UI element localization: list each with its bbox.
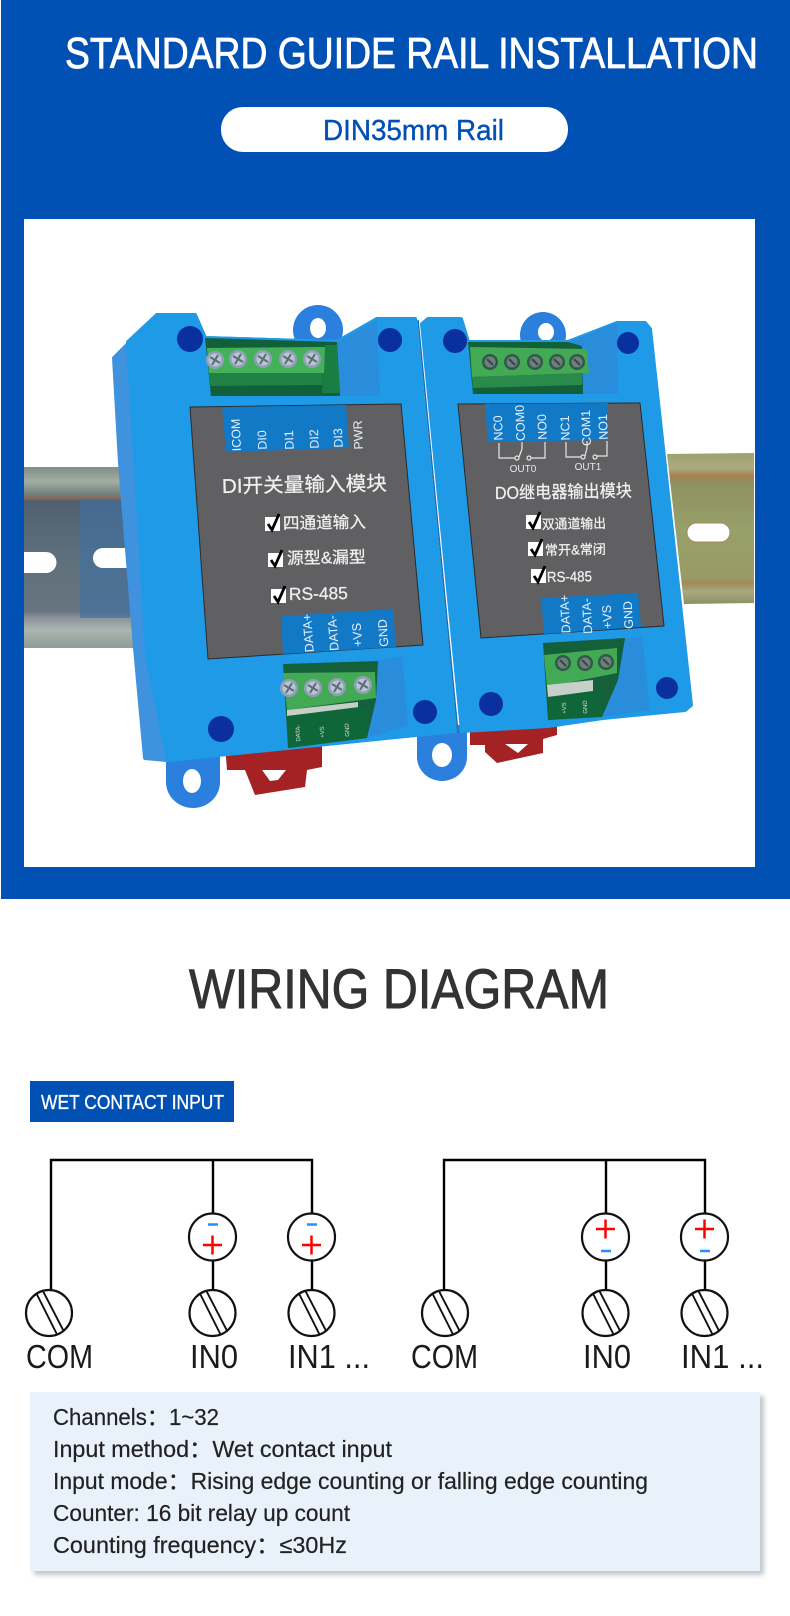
DO label panel: NO0 (535, 414, 550, 440)
DO bottom terminal block (543, 637, 650, 720)
DO label panel: 常开&常闭 (545, 542, 606, 558)
DI label panel: DATA- (325, 615, 342, 651)
DI bottom terminal block: GND (345, 723, 351, 737)
DIN rail right section (667, 453, 754, 604)
DO label panel: DO继电器输出模块 (495, 481, 632, 503)
DI label panel (190, 404, 423, 659)
DI label panel: DATA+ (300, 613, 317, 653)
DO label panel: DATA+ (557, 594, 573, 634)
DI label panel: GND (375, 619, 391, 647)
DI top terminal block (205, 320, 380, 396)
rail size pill (221, 107, 568, 152)
DO label panel: RS-485 (547, 569, 592, 586)
DO bottom terminal block: GND (583, 700, 589, 714)
DI bottom terminal block: +VS (320, 726, 326, 738)
wiring diagram: minus-top sources: COM (26, 1338, 93, 1375)
DI label panel: 四通道输入 (283, 513, 366, 533)
DI label panel: DI3 (331, 428, 346, 448)
DI label panel: 源型&漏型 (287, 548, 366, 568)
DI label panel: ICOM (229, 418, 244, 452)
wet contact input badge (30, 1081, 234, 1122)
DI label panel: DI2 (307, 429, 322, 449)
DO bottom terminal block: +VS (562, 702, 568, 714)
DO label panel: NC1 (558, 415, 573, 441)
wiring diagram heading: WIRING DIAGRAM (189, 957, 609, 1020)
wiring diagram: plus-top sources: IN1 ... (681, 1338, 764, 1375)
DO label panel: 双通道输出 (542, 516, 606, 532)
wiring diagram: plus-top sources: IN0 (583, 1338, 631, 1375)
DO label panel: DATA- (579, 598, 595, 634)
spec: counter: Counter: 16 bit relay up count (53, 1500, 351, 1526)
DO relay module (418, 319, 691, 733)
product photo panel (24, 219, 755, 867)
DI input module (114, 315, 455, 760)
DO label panel: NC0 (491, 415, 506, 441)
wiring diagram: plus-top sources (411, 1160, 764, 1375)
wiring diagram: minus-top sources: IN0 (190, 1338, 238, 1375)
DO top terminal block (468, 323, 618, 394)
module seam (418, 320, 458, 733)
DI label panel: +VS (350, 623, 365, 647)
blue installation panel (1, 0, 790, 899)
DI screw holes (177, 326, 437, 742)
DO label panel: NO1 (596, 414, 611, 440)
DI label panel: DI开关量输入模块 (222, 472, 387, 498)
wiring diagram: minus-top sources (26, 1160, 370, 1375)
DI module housing (114, 315, 455, 760)
spec: input mode: Input mode：Rising edge counting or falling edge counting (53, 1468, 648, 1494)
wiring diagram: minus-top sources: IN1 ... (288, 1338, 370, 1375)
spec: channels: Channels：1~32 (53, 1404, 219, 1430)
DO screw holes (443, 329, 678, 716)
DO label panel: OUT0 (510, 464, 537, 475)
DO label panel: +VS (600, 605, 615, 629)
DI bottom terminal block (280, 656, 408, 748)
DO label panel: OUT1 (575, 462, 602, 473)
wet contact input badge: WET CONTACT INPUT (41, 1092, 224, 1114)
DI bottom terminal block: DATA- (296, 724, 302, 742)
DO label panel: COM1 (579, 410, 594, 446)
mounting ears and red clips (166, 305, 566, 808)
DI label panel: DI1 (282, 430, 297, 450)
DI label panel: PWR (351, 420, 366, 450)
DO label panel: COM0 (513, 405, 528, 441)
DI label panel: RS-485 (289, 583, 348, 604)
spec: input method: Input method：Wet contact input (53, 1436, 393, 1462)
specifications panel (30, 1392, 764, 1575)
DO label panel: GND (621, 601, 636, 629)
DI label panel: DI0 (255, 430, 270, 450)
DIN rail left section (24, 467, 136, 648)
rail size pill: DIN35mm Rail (323, 115, 504, 147)
spec: counting frequency: Counting frequency：≤30Hz (53, 1532, 347, 1558)
DO module housing (422, 319, 691, 731)
wiring diagram: plus-top sources: COM (411, 1338, 478, 1375)
DO label panel (458, 403, 664, 638)
